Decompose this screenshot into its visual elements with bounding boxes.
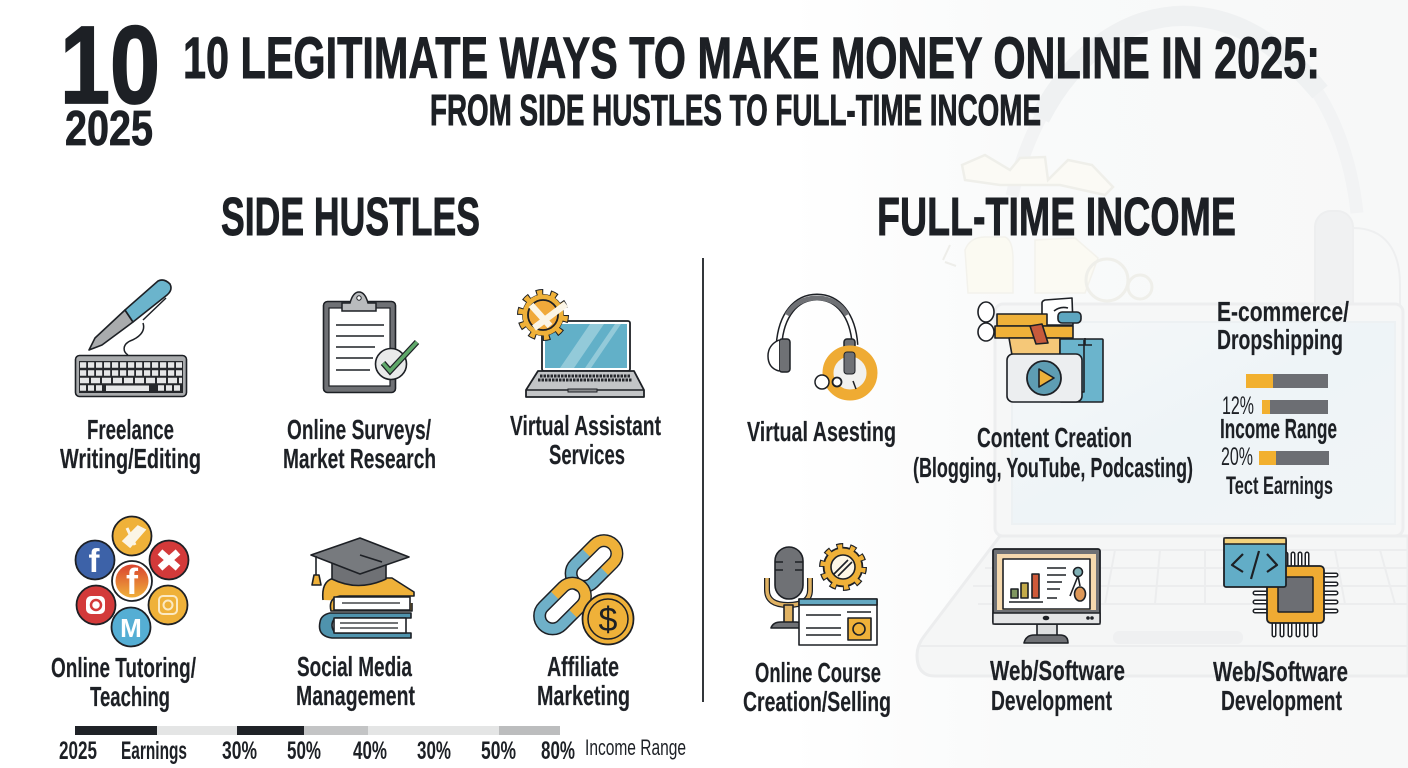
bar chart: income range strip: 80% xyxy=(541,737,575,765)
label: social media management xyxy=(296,651,415,711)
label: content creation: Content Creation xyxy=(977,422,1132,453)
heading: full-time income: FULL-TIME INCOME xyxy=(877,187,1236,247)
label: web/software development (centre): Development xyxy=(991,685,1112,716)
icon: laptop with gear xyxy=(521,293,644,397)
label: online surveys/market research: Online Surveys/ xyxy=(287,414,431,445)
label: e-commerce/dropshipping: Dropshipping xyxy=(1217,324,1343,355)
label: freelance writing/editing: Writing/Editing xyxy=(60,443,201,474)
bar chart: e-commerce income bars xyxy=(1220,374,1337,500)
label: virtual assistant services: Services xyxy=(549,439,625,470)
icon: microphone, gear and course window xyxy=(767,547,877,645)
bar chart: e-commerce income bars: Income Range xyxy=(1220,413,1337,444)
heading: side hustles: SIDE HUSTLES xyxy=(221,187,480,247)
label: online course creation/selling: Creation/Selling xyxy=(743,686,891,717)
icon: chain links with dollar coin xyxy=(534,535,634,644)
bar chart: income range strip: 50% xyxy=(287,737,321,765)
label: social media management: Management xyxy=(296,680,415,711)
icon: social media circles: f xyxy=(88,542,100,579)
label: web/software development (right): Development xyxy=(1221,685,1342,716)
label: online tutoring/teaching: Teaching xyxy=(90,681,170,712)
label: online surveys/market research xyxy=(283,414,436,474)
subtitle: FROM SIDE HUSTLES TO FULL-TIME INCOME xyxy=(430,86,1041,135)
bar chart: income range strip: Income Range xyxy=(585,735,686,760)
label: online tutoring/teaching xyxy=(51,652,196,712)
icon: graduation cap on books xyxy=(311,538,414,638)
icon: social media circles xyxy=(76,516,188,646)
bar chart: e-commerce income bars: Tect Earnings xyxy=(1226,472,1333,500)
label: affiliate marketing xyxy=(537,651,630,711)
label: content creation xyxy=(913,422,1193,483)
bar chart: e-commerce income bars: 20% xyxy=(1221,443,1253,471)
icon: clipboard with checkmark xyxy=(324,292,417,392)
bar chart: income range strip: 50% xyxy=(481,737,516,765)
label: online tutoring/teaching: Online Tutoring/ xyxy=(51,652,196,683)
label: online course creation/selling xyxy=(743,657,891,717)
label: content creation: (Blogging, YouTube, Podcasting) xyxy=(913,452,1193,483)
icon: headset with ring xyxy=(768,297,872,395)
label: e-commerce/dropshipping: E-commerce/ xyxy=(1217,296,1349,327)
label: web/software development (right): Web/Software xyxy=(1213,656,1348,687)
panel: full-time income items xyxy=(743,296,1349,717)
icon: social media circles: f xyxy=(126,561,139,602)
bar chart: income range strip: 2025 xyxy=(59,737,97,765)
icon: chain links with dollar coin: $ xyxy=(599,601,618,639)
label: e-commerce/dropshipping xyxy=(1217,296,1349,355)
icon: pen and keyboard xyxy=(76,280,186,396)
label: affiliate marketing: Marketing xyxy=(537,680,630,711)
label: virtual assistant services xyxy=(510,410,661,470)
bar chart: income range strip: 30% xyxy=(222,737,257,765)
icon: monitor with charts xyxy=(993,549,1100,643)
watermark: laptop and headset xyxy=(917,12,1408,676)
big 10 2025 badge: 2025 xyxy=(65,102,153,156)
panel: side hustles items xyxy=(51,280,661,712)
bar chart: e-commerce income bars: 12% xyxy=(1222,392,1254,420)
bar chart: income range strip xyxy=(59,726,686,765)
icon: social media circles: M xyxy=(120,613,142,643)
label: online course creation/selling: Online Course xyxy=(755,657,881,688)
label: online surveys/market research: Market Research xyxy=(283,443,436,474)
big 10 2025 badge: 10 xyxy=(60,4,160,127)
label: web/software development (centre) xyxy=(990,655,1125,716)
icon: code window and microchip xyxy=(1224,538,1336,635)
label: social media management: Social Media xyxy=(297,651,412,682)
label: virtual assistant services: Virtual Assistant xyxy=(510,410,661,441)
label: web/software development (centre): Web/Software xyxy=(990,655,1125,686)
label: web/software development (right) xyxy=(1213,656,1348,716)
bar chart: income range strip: 40% xyxy=(353,737,387,765)
bar chart: income range strip: Earnings xyxy=(121,737,187,765)
icon: content creation boxes and video card xyxy=(978,298,1103,402)
label: freelance writing/editing xyxy=(60,414,201,474)
bar chart: income range strip: 30% xyxy=(417,737,451,765)
label: affiliate marketing: Affiliate xyxy=(547,651,619,682)
big 10 2025 badge xyxy=(60,4,160,156)
label: virtual asesting: Virtual Asesting xyxy=(747,416,896,447)
divider between sections xyxy=(702,258,704,702)
label: freelance writing/editing: Freelance xyxy=(87,414,174,445)
